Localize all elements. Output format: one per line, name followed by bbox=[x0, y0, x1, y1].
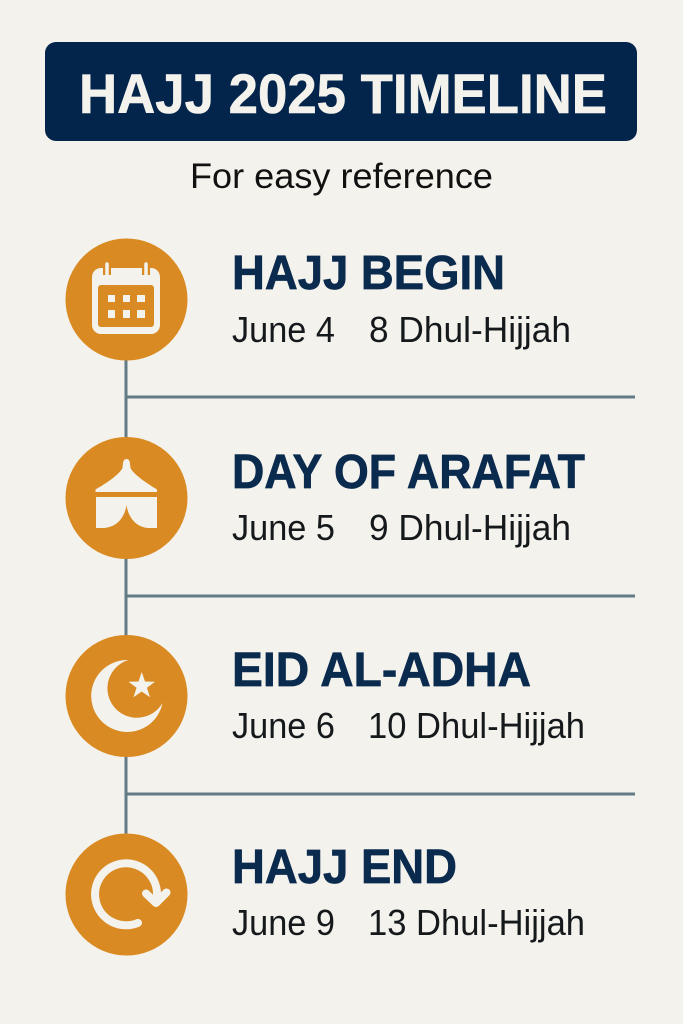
date: Hajj end: 13 Dhul-Hijjah bbox=[368, 902, 585, 943]
date: Day of Arafat: 9 Dhul-Hijjah bbox=[369, 507, 571, 548]
heading: Hajj begin: HAJJ BEGIN bbox=[232, 247, 505, 300]
date: Hajj begin: June 4 bbox=[232, 309, 335, 350]
heading: Eid al-Adha: EID AL-ADHA bbox=[232, 644, 531, 697]
panel: Eid al-Adha bbox=[66, 635, 585, 757]
date: Day of Arafat: June 5 bbox=[232, 507, 335, 548]
title banner bbox=[45, 42, 637, 141]
date: Eid al-Adha: June 6 bbox=[232, 705, 335, 746]
heading: Hajj end: HAJJ END bbox=[232, 841, 457, 894]
subtitle: For easy reference bbox=[190, 157, 493, 196]
heading: Day of Arafat: DAY OF ARAFAT bbox=[232, 446, 585, 499]
icon: circular arrow bbox=[66, 834, 188, 956]
panel: Day of Arafat bbox=[66, 437, 585, 559]
icon: crescent and star bbox=[66, 635, 188, 757]
date: Eid al-Adha: 10 Dhul-Hijjah bbox=[368, 705, 585, 746]
date: Hajj end: June 9 bbox=[232, 902, 335, 943]
panel: Hajj begin bbox=[66, 238, 571, 360]
date: Hajj begin: 8 Dhul-Hijjah bbox=[369, 309, 571, 350]
icon: calendar bbox=[66, 238, 188, 360]
icon: tent bbox=[66, 437, 188, 559]
title banner: HAJJ 2025 TIMELINE bbox=[79, 62, 607, 125]
panel: Hajj end bbox=[66, 834, 585, 956]
